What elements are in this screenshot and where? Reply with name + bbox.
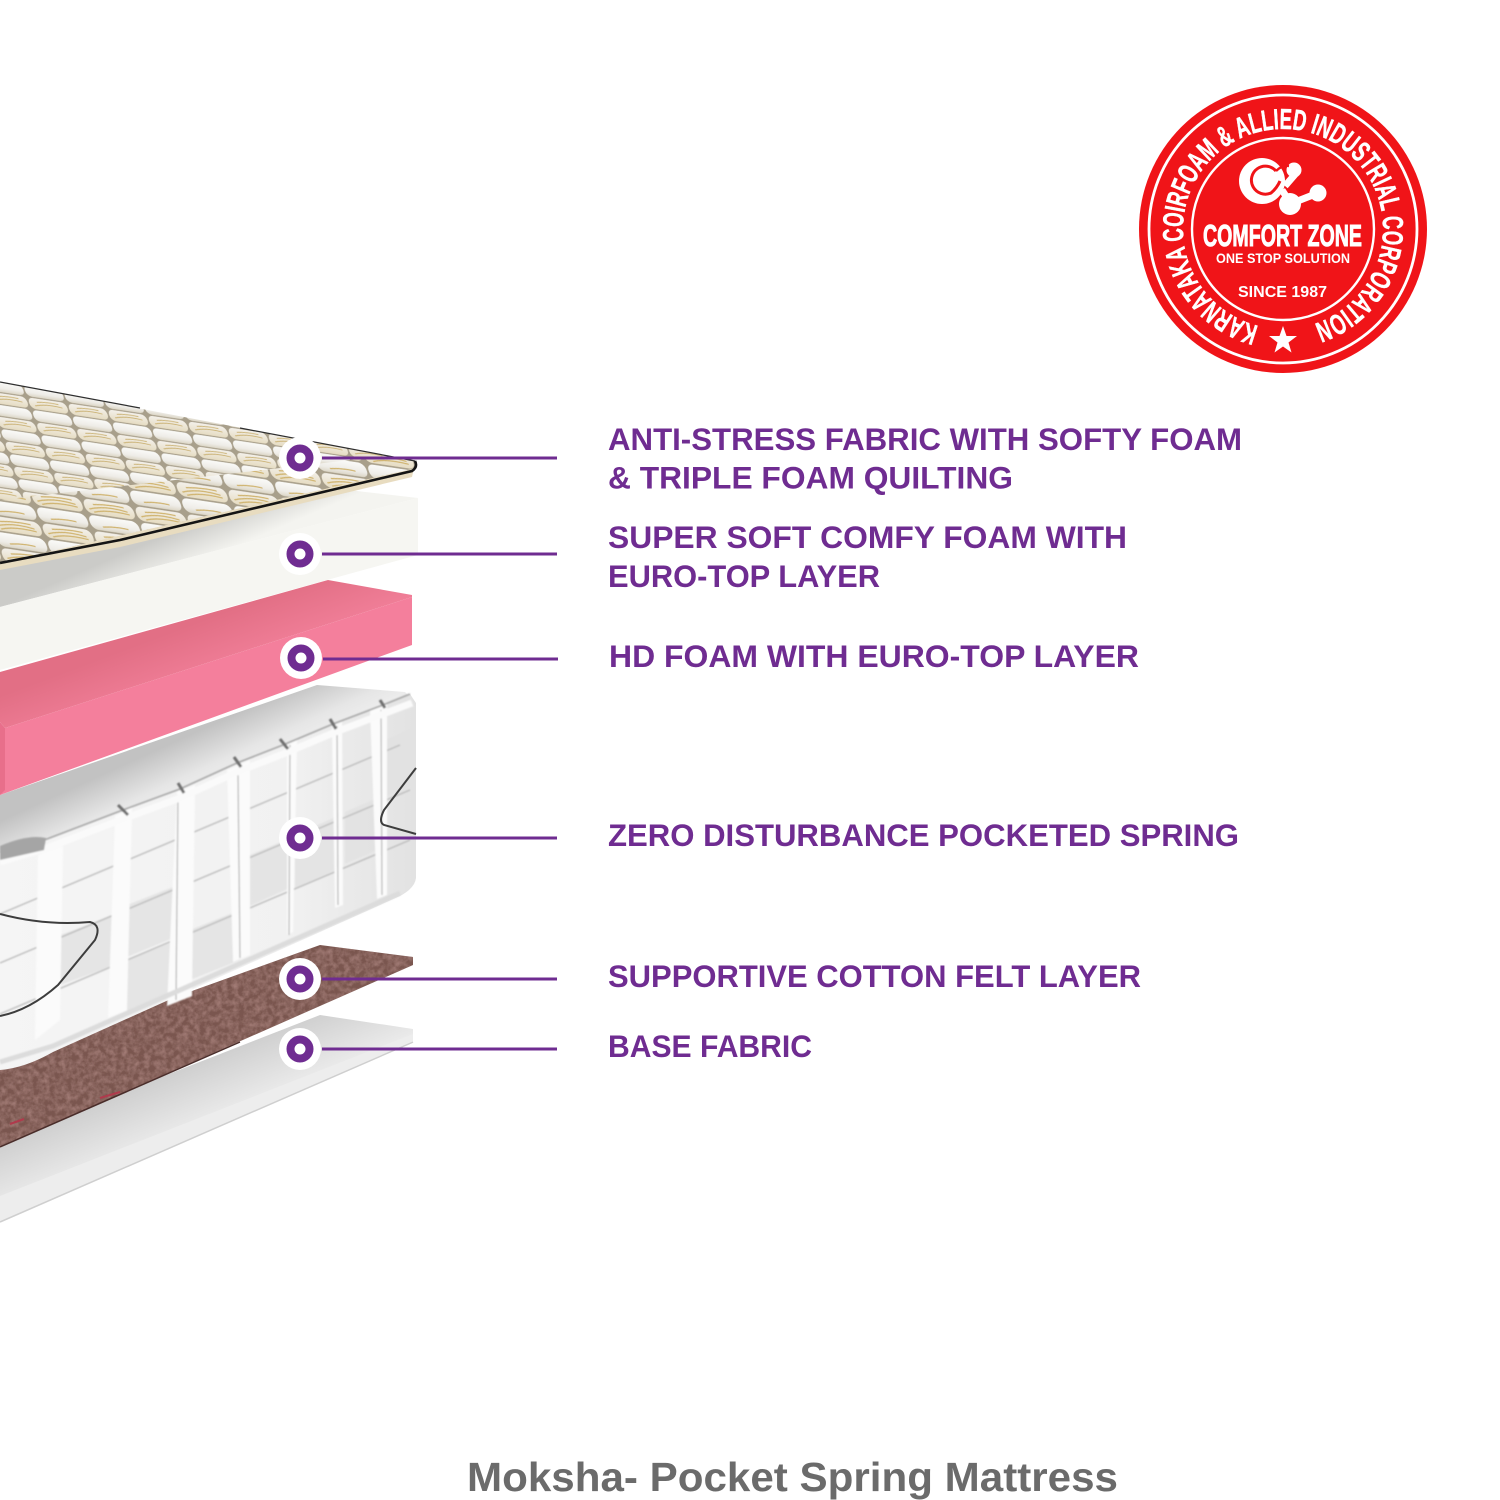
label: base fabric: BASE FABRIC xyxy=(608,1028,812,1064)
layer: base fabric xyxy=(0,1015,413,1222)
label: super soft comfy foam: SUPER SOFT COMFY FOAM WITH xyxy=(608,519,1127,555)
mattress layers illustration xyxy=(0,382,420,1222)
badge circular text: KARNATAKA COIRFOAM & ALLIED INDUSTRIAL CORPORATION xyxy=(1162,108,1404,346)
badge since: SINCE 1987 xyxy=(1238,284,1327,301)
label: cotton felt: SUPPORTIVE COTTON FELT LAYER xyxy=(608,958,1141,994)
label: HD foam: HD FOAM WITH EURO-TOP LAYER xyxy=(609,638,1139,674)
spring side face xyxy=(0,694,416,1070)
label: anti-stress fabric xyxy=(608,421,1242,496)
spring pockets and stitching xyxy=(0,694,412,1062)
layer: white comfort foam xyxy=(0,488,418,670)
callout 5: marker and leader xyxy=(279,958,557,1000)
icon: star xyxy=(1269,326,1297,352)
layer: cotton felt xyxy=(0,945,413,1147)
title: product name: Moksha- Pocket Spring Mattress xyxy=(467,1454,1118,1500)
badge brand name: COMFORT ZONE xyxy=(1203,218,1362,253)
label: pocketed spring: ZERO DISTURBANCE POCKETED SPRING xyxy=(608,817,1239,853)
layer: quilted anti-stress fabric xyxy=(0,382,420,570)
callout 3: marker and leader xyxy=(280,637,558,679)
icon: Comfort Zone logo xyxy=(1239,158,1326,215)
badge disc and rings xyxy=(1139,85,1427,373)
label: super soft comfy foam xyxy=(608,519,1127,594)
callout 2: marker and leader xyxy=(279,533,557,575)
badge tagline: ONE STOP SOLUTION xyxy=(1216,251,1350,266)
callout 1: marker and leader xyxy=(279,437,557,479)
label: super soft comfy foam: EURO-TOP LAYER xyxy=(608,558,880,594)
layer: pink HD foam xyxy=(0,580,412,795)
spring wires xyxy=(0,768,416,1016)
callout 4: marker and leader xyxy=(279,817,557,859)
layer: pocketed spring unit xyxy=(0,685,416,1070)
spring top surface xyxy=(0,685,416,853)
label: anti-stress fabric: ANTI-STRESS FABRIC WITH SOFTY FOAM xyxy=(608,421,1242,457)
badge: Comfort Zone seal xyxy=(1139,85,1427,373)
label: anti-stress fabric: & TRIPLE FOAM QUILTING xyxy=(608,460,1013,496)
callout 6: marker and leader xyxy=(279,1028,557,1070)
